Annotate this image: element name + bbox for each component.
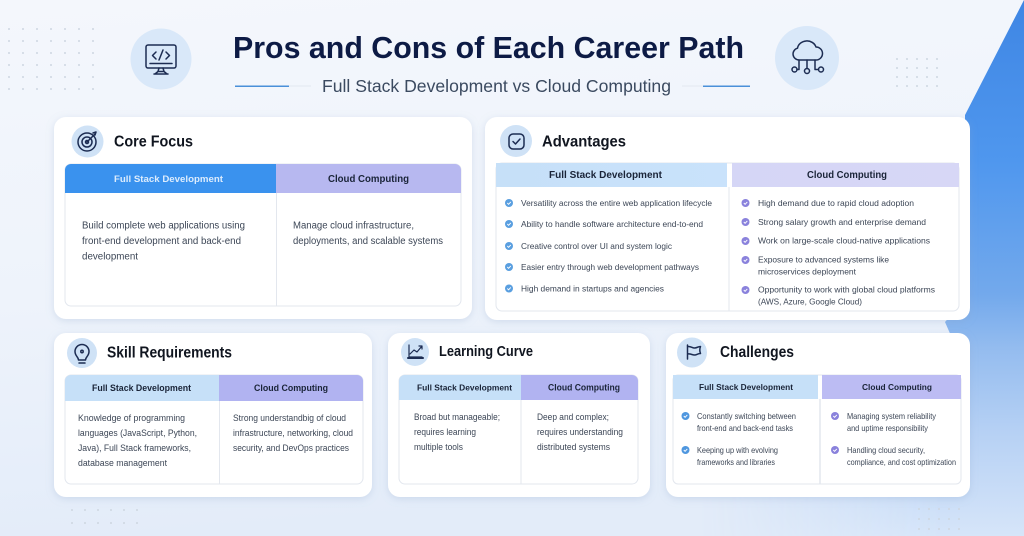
subtitle rule right: [682, 86, 750, 87]
decorative dots bottom right: [918, 508, 960, 530]
panel: core focus: [54, 117, 472, 319]
comparison table: [673, 375, 961, 484]
cloud advantages list: microservices deployment: [758, 266, 857, 276]
subtitle: Full Stack Development vs Cloud Computing: [322, 76, 671, 96]
comparison table: requires learning: [414, 427, 476, 437]
full stack challenges list: frameworks and libraries: [697, 458, 775, 467]
comparison table: Java), Full Stack frameworks,: [78, 443, 191, 453]
comparison table: Cloud Computing: [548, 382, 620, 392]
comparison table: development: [82, 252, 138, 262]
subtitle rule left: [235, 86, 311, 87]
cloud advantages list: Strong salary growth and enterprise demand: [758, 217, 926, 227]
panel: challenges: [666, 333, 970, 497]
comparison table: Build complete web applications using: [82, 220, 245, 232]
comparison table: Broad but manageable;: [414, 412, 500, 422]
cloud advantages list: (AWS, Azure, Google Cloud): [758, 296, 862, 306]
cloud challenges list: compliance, and cost optimization: [847, 458, 956, 467]
comparison table: database management: [78, 458, 167, 468]
comparison table: Full Stack Development: [92, 383, 191, 393]
full stack advantages list: [505, 198, 712, 294]
full stack advantages list: Easier entry through web development pathways: [521, 262, 700, 272]
heading: Learning Curve: [439, 344, 533, 360]
comparison table: [399, 375, 638, 484]
comparison table: Cloud Computing: [328, 174, 409, 185]
full stack advantages list: Versatility across the entire web application lifecycle: [521, 198, 712, 208]
decorative blue shape: [780, 0, 1024, 536]
icon: code monitor: [130, 28, 192, 90]
comparison table: deployments, and scalable systems: [293, 236, 443, 247]
comparison table: Deep and complex;: [537, 412, 609, 422]
cloud advantages list: Opportunity to work with global cloud platforms: [758, 284, 936, 294]
comparison table: Cloud Computing: [807, 170, 887, 181]
comparison table: languages (JavaScript, Python,: [78, 428, 197, 438]
comparison table: Cloud Computing: [862, 382, 932, 392]
comparison table: Full Stack Development: [114, 174, 224, 185]
icon: light bulb: [67, 338, 97, 368]
comparison table: [496, 163, 959, 311]
comparison table: Full Stack Development: [549, 170, 663, 181]
comparison table: [65, 375, 363, 484]
comparison table: Full Stack Development: [699, 382, 793, 392]
full stack challenges list: [682, 412, 796, 467]
heading: Advantages: [542, 134, 626, 150]
cloud advantages list: [742, 198, 936, 306]
decorative dots top left: [8, 28, 94, 90]
comparison table: infrastructure, networking, cloud: [233, 428, 353, 438]
decorative dots bottom left: [71, 509, 138, 524]
comparison table: [65, 164, 461, 306]
cloud challenges list: Handling cloud security,: [847, 446, 925, 455]
cloud advantages list: Work on large-scale cloud-native applications: [758, 236, 931, 246]
comparison table: Cloud Computing: [254, 383, 328, 393]
comparison table: Full Stack Development: [417, 382, 512, 392]
icon: flag: [677, 338, 707, 368]
panel: learning curve: [388, 333, 650, 497]
cloud challenges list: and uptime responsibility: [847, 424, 929, 433]
panel: skill requirements: [54, 333, 372, 497]
full stack challenges list: front-end and back-end tasks: [697, 424, 793, 433]
icon: cloud network: [775, 26, 839, 90]
comparison table: Strong understandbig of cloud: [233, 413, 346, 423]
comparison table: security, and DevOps practices: [233, 443, 349, 453]
cloud advantages list: High demand due to rapid cloud adoption: [758, 198, 914, 208]
cloud advantages list: Exposure to advanced systems like: [758, 254, 889, 264]
heading: Skill Requirements: [107, 344, 232, 362]
icon: checkbox: [500, 125, 532, 157]
decorative dots top right: [896, 58, 938, 87]
cloud challenges list: [831, 412, 956, 467]
icon: growth chart: [401, 338, 429, 366]
full stack advantages list: High demand in startups and agencies: [521, 284, 665, 294]
comparison table: requires understanding: [537, 427, 623, 437]
full stack advantages list: Creative control over UI and system logic: [521, 241, 673, 251]
comparison table: Knowledge of programming: [78, 413, 185, 423]
title: Pros and Cons of Each Career Path: [233, 30, 744, 65]
cloud challenges list: Managing system reliability: [847, 412, 937, 421]
panel: advantages: [485, 117, 970, 320]
comparison table: multiple tools: [414, 442, 464, 452]
heading: Challenges: [720, 344, 794, 361]
comparison table: front-end development and back-end: [82, 236, 241, 247]
comparison table: Manage cloud infrastructure,: [293, 220, 414, 232]
icon: target: [72, 126, 104, 158]
full stack challenges list: Constantly switching between: [697, 412, 796, 421]
heading: Core Focus: [114, 134, 193, 150]
comparison table: distributed systems: [537, 442, 611, 452]
full stack challenges list: Keeping up with evolving: [697, 446, 778, 455]
full stack advantages list: Ability to handle software architecture end-to-end: [521, 219, 703, 229]
